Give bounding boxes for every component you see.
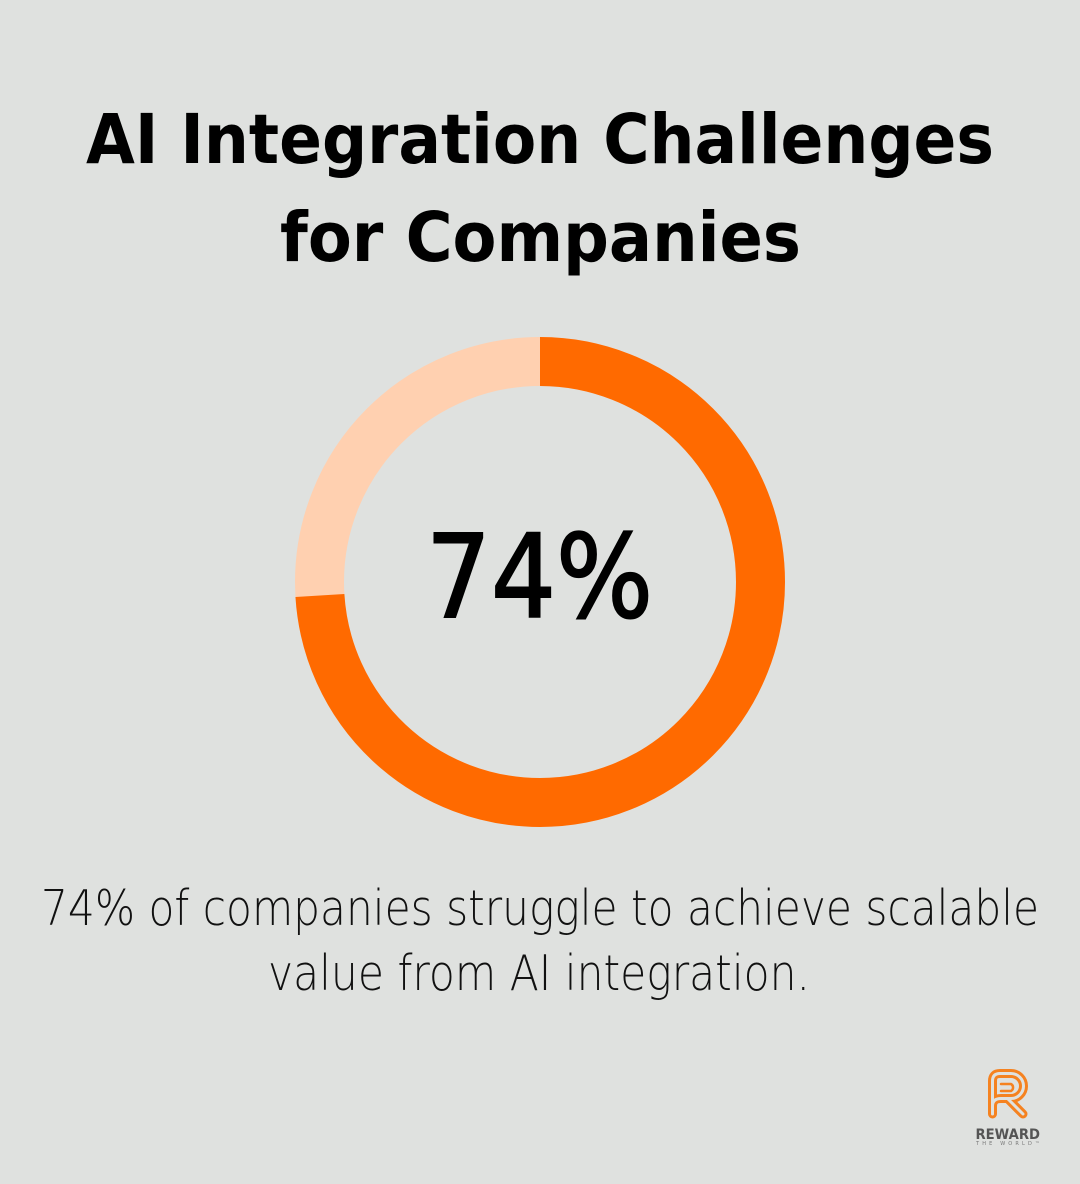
description text (41, 880, 1039, 1002)
description text: value from AI integration. (268, 945, 810, 1002)
title: AI Integration Challenges (86, 100, 994, 180)
icon: R mark (992, 1074, 1023, 1114)
donut chart: 74% (320, 362, 760, 802)
donut centre value: 74% (426, 511, 653, 645)
logo tagline: THE WORLD™ (975, 1141, 1040, 1147)
title: for Companies (280, 198, 801, 278)
logo wordmark: REWARD (976, 1127, 1040, 1143)
title (86, 100, 994, 278)
logo: Reward the World (975, 1074, 1040, 1147)
